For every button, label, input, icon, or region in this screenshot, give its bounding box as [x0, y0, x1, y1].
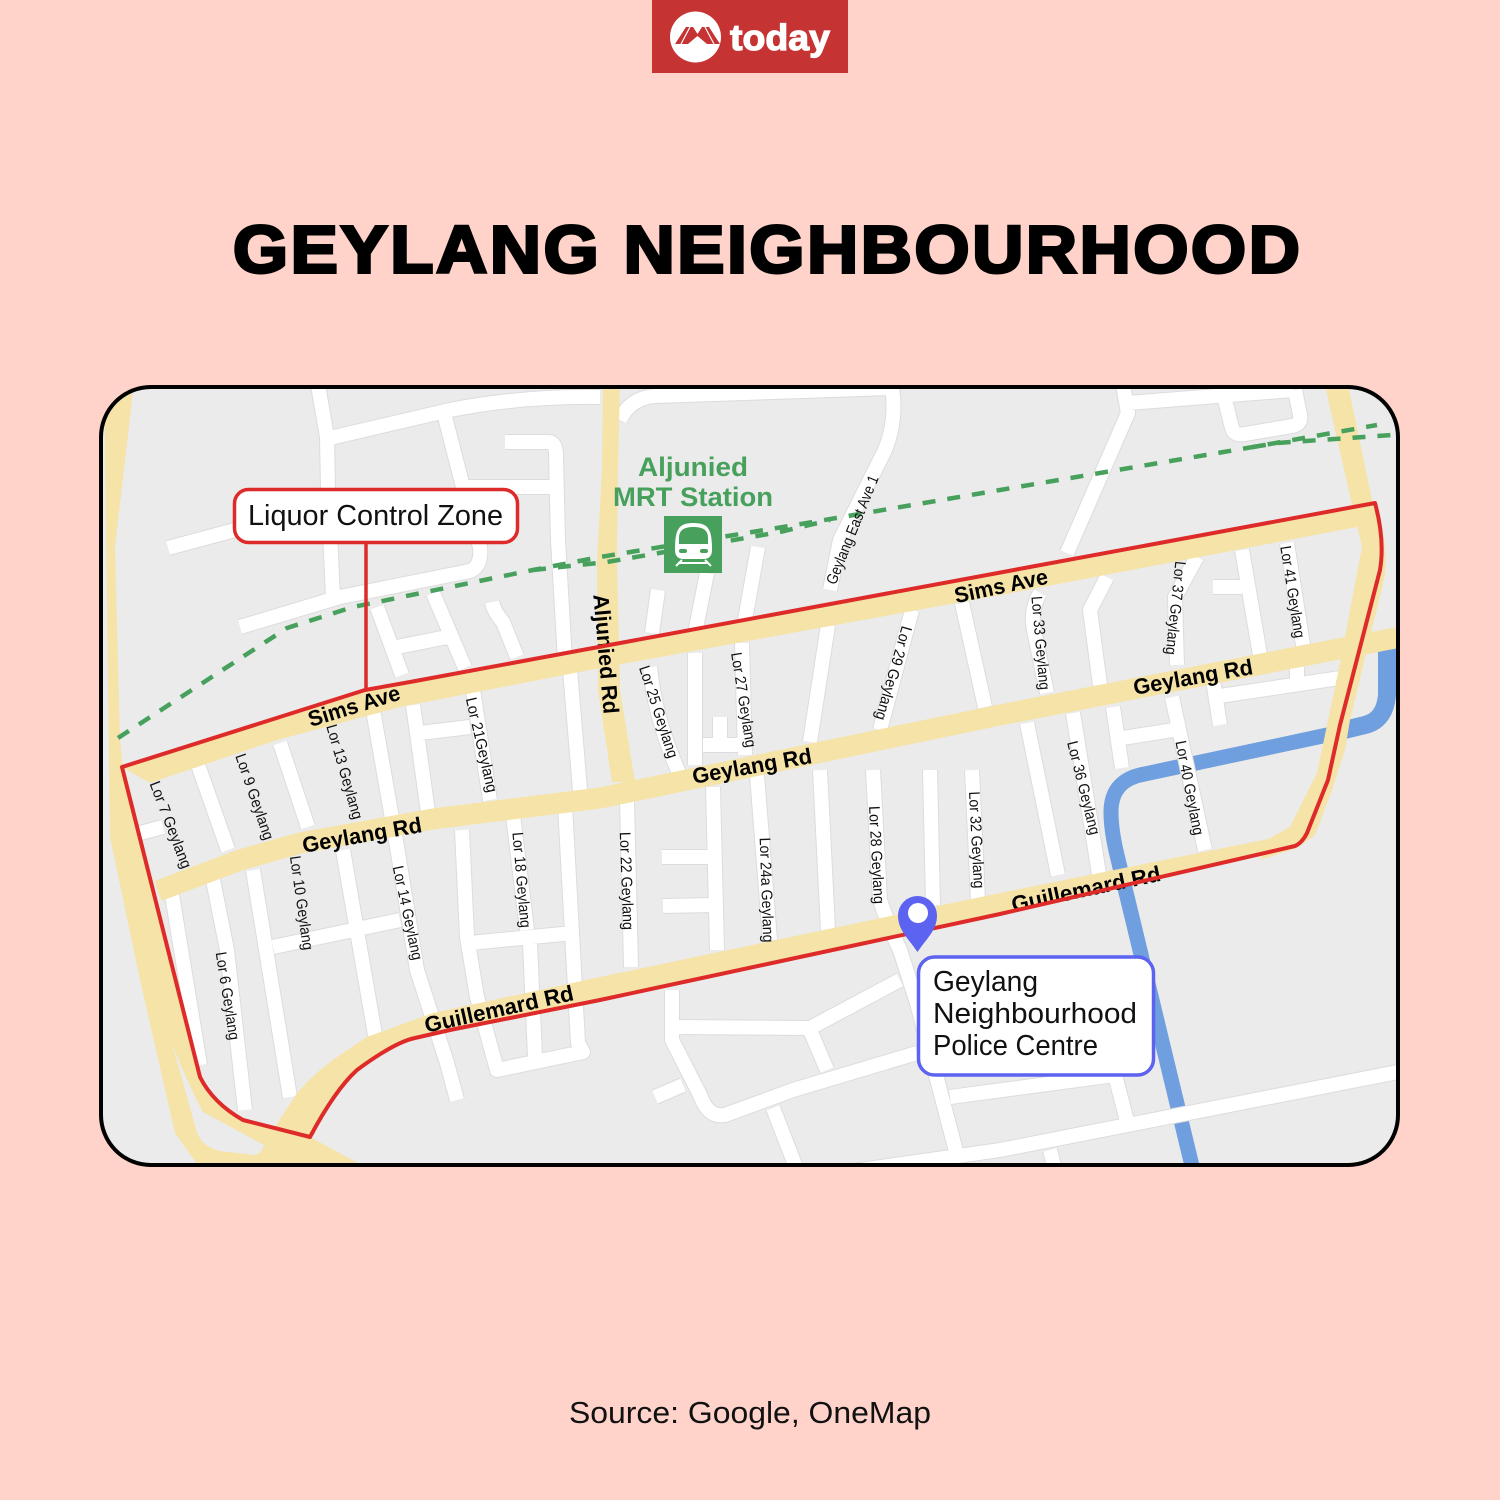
panel: map — [101, 385, 1400, 1180]
street labels: Lor 10 Geylang — [286, 855, 316, 951]
road names: Sims Ave — [952, 564, 1050, 608]
street labels: Lor 32 Geylang — [965, 791, 987, 889]
label: Aljunied MRT Station: MRT Station — [613, 482, 773, 512]
street labels: Lor 41 Geylang — [1276, 545, 1308, 639]
street labels: Lor 27 Geylang — [727, 651, 759, 749]
map frame — [101, 387, 1398, 1165]
street labels: Lor 6 Geylang — [212, 951, 242, 1041]
callout: Geylang Neighbourhood Police Centre — [918, 957, 1154, 1075]
street labels: Lor 14 Geylang — [389, 864, 425, 962]
street labels: Lor 40 Geylang — [1171, 739, 1207, 837]
street labels: Lor 29 Geylang — [871, 624, 915, 722]
street labels: Lor 13 Geylang — [322, 723, 366, 821]
source: Source: Google, OneMap — [569, 1395, 931, 1430]
street labels: Lor 36 Geylang — [1063, 739, 1103, 837]
road names: Geylang Rd — [690, 743, 814, 789]
icon: MRT train — [664, 516, 722, 573]
icon: location pin — [898, 896, 937, 952]
callout: Geylang Neighbourhood Police Centre: Geylang — [933, 966, 1038, 998]
street labels — [146, 473, 1308, 1041]
street labels: Geylang East Ave 1 — [823, 473, 883, 587]
street labels: Lor 21Geylang — [462, 696, 500, 794]
road names — [300, 564, 1255, 1038]
major roads — [104, 385, 1386, 1168]
road names: Aljunied Rd — [588, 593, 624, 715]
callout: Liquor Control Zone — [234, 490, 518, 690]
street labels: Lor 25 Geylang — [635, 664, 681, 760]
road names: Guillemard Rd — [1009, 861, 1163, 917]
road names: Guillemard Rd — [422, 980, 576, 1038]
street labels: Lor 28 Geylang — [865, 806, 887, 904]
logo: today — [652, 0, 848, 73]
road names: Sims Ave — [305, 680, 403, 732]
local streets — [140, 385, 1398, 1180]
road: Aljunied Rd — [597, 385, 635, 782]
street labels: Lor 33 Geylang — [1027, 595, 1053, 691]
title: GEYLANG NEIGHBOURHOOD — [233, 212, 1302, 287]
callout: Geylang Neighbourhood Police Centre: Police Centre — [933, 1030, 1098, 1062]
street labels: Lor 24a Geylang — [756, 837, 776, 943]
liquor control zone boundary — [122, 503, 1382, 1137]
street labels: Lor 18 Geylang — [508, 831, 534, 929]
road names: Geylang Rd — [1131, 654, 1255, 700]
MRT line — [118, 425, 1392, 738]
street labels: Lor 9 Geylang — [231, 752, 277, 842]
street labels: Lor 22 Geylang — [616, 832, 636, 930]
road names: Geylang Rd — [300, 812, 424, 858]
callout: Liquor Control Zone: Liquor Control Zone — [248, 500, 503, 532]
logo: today: today — [730, 17, 830, 58]
street labels: Lor 7 Geylang — [146, 779, 194, 871]
callout: Geylang Neighbourhood Police Centre: Neighbourhood — [933, 998, 1137, 1030]
canal — [1111, 645, 1387, 1170]
label: Aljunied MRT Station: Aljunied — [638, 452, 748, 482]
street labels: Lor 37 Geylang — [1162, 560, 1188, 656]
